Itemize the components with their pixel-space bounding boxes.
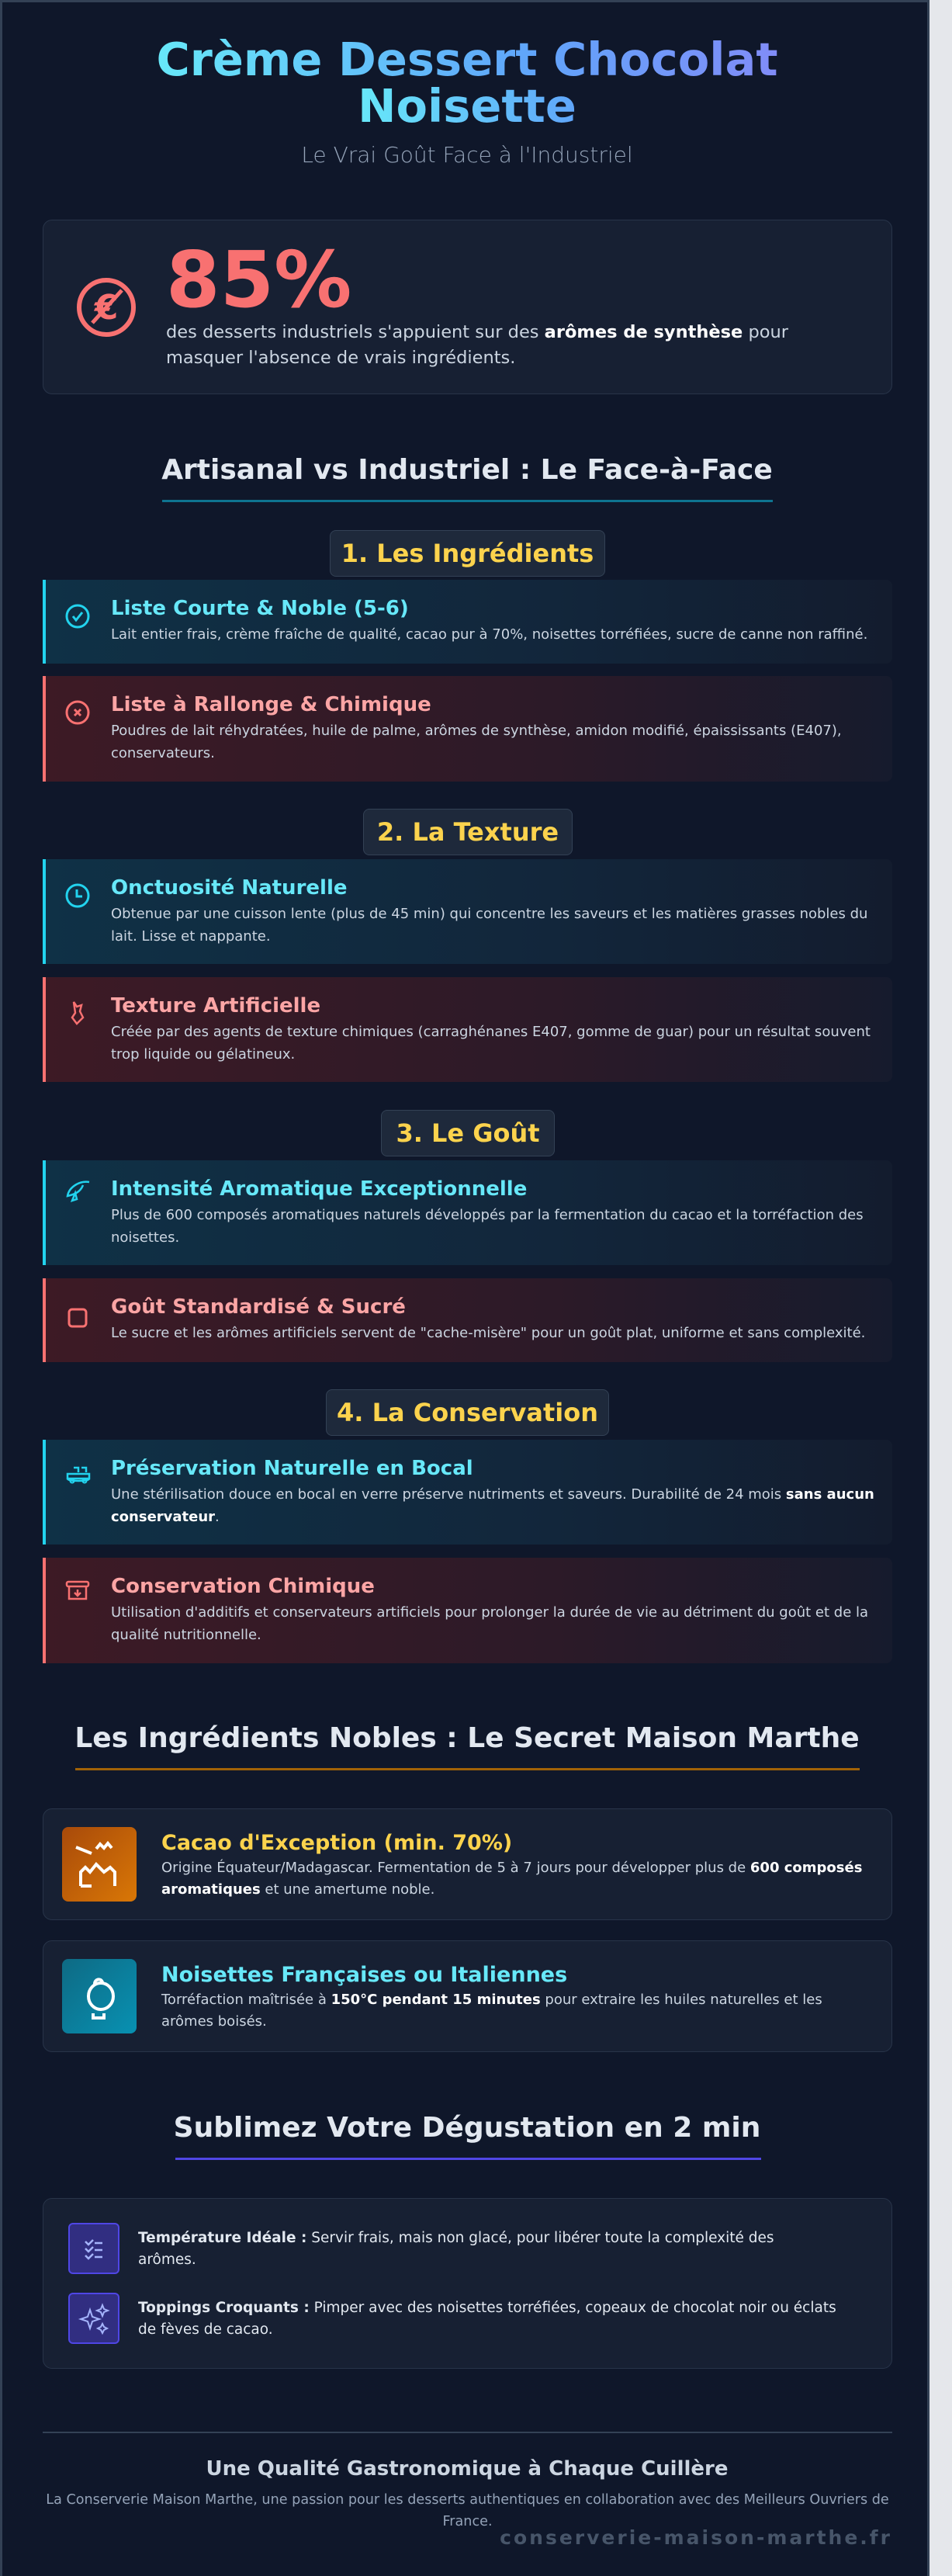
card: noisettes: Torréfaction maîtrisée à 150°C pendant 15 minutes pour extraire les huiles naturelles et les arômes boisés. <box>161 1992 822 2030</box>
footer title: Une Qualité Gastronomique à Chaque Cuillère <box>206 2457 729 2481</box>
tip: toppings <box>68 2293 836 2344</box>
tab 1 <box>330 530 605 577</box>
card: intensité <box>43 1160 892 1265</box>
watermark: conserverie-maison-marthe.fr <box>500 2526 892 2549</box>
card: intensité: Intensité Aromatique Exceptionnelle <box>111 1177 527 1201</box>
icon: cross <box>65 700 90 725</box>
tips panel <box>43 2198 892 2369</box>
icon: square <box>68 1309 87 1327</box>
card: liste courte: Liste Courte & Noble (5-6) <box>111 597 409 620</box>
title: Crème Dessert Chocolat <box>156 33 778 86</box>
card: préservation: Préservation Naturelle en Bocal <box>111 1457 473 1480</box>
tip: température: Température Idéale : Servir frais, mais non glacé, pour libérer toute la complexité des arômes. <box>138 2230 774 2268</box>
card: texture artificielle: Créée par des agents de texture chimiques (carraghénanes E407, gomme de guar) pour un résultat souvent trop liquide ou gélatineux. <box>111 1024 871 1063</box>
tab 3 <box>381 1110 555 1156</box>
card: noisettes <box>43 1940 892 2052</box>
tab 4 <box>326 1389 609 1436</box>
stat text: des desserts industriels s'appuient sur des arômes de synthèse pour masquer l'absence de vrais ingrédients. <box>166 322 788 368</box>
icon: sparkles <box>68 2293 119 2344</box>
heading: dégustation: Sublimez Votre Dégustation en 2 min <box>174 2112 760 2144</box>
card: texture artificielle: Texture Artificielle <box>111 994 320 1018</box>
card: liste rallonge: Liste à Rallonge & Chimique <box>111 693 431 716</box>
icon: thermo <box>68 2223 119 2274</box>
card: noisettes: Noisettes Françaises ou Italiennes <box>161 1963 567 1987</box>
card: conservation chimique: Conservation Chimique <box>111 1575 375 1598</box>
tab 2 <box>363 809 573 855</box>
subtitle: Le Vrai Goût Face à l'Industriel <box>301 142 633 168</box>
card: onctuosité: Onctuosité Naturelle <box>111 876 347 900</box>
icon: jar truck <box>67 1467 90 1484</box>
icon: check <box>65 604 90 629</box>
tab 4: 4. La Conservation <box>337 1398 598 1427</box>
icon: euro crossed: € <box>94 288 118 328</box>
icon: cacao <box>62 1827 137 1902</box>
icon: euro crossed <box>77 278 136 337</box>
tab 1: 1. Les Ingrédients <box>341 539 594 568</box>
icon: noisette <box>62 1959 137 2033</box>
stat panel <box>43 220 892 394</box>
card: onctuosité <box>43 859 892 964</box>
card: cacao: Origine Équateur/Madagascar. Fermentation de 5 à 7 jours pour développer plus de 600 composés aromatiques et une amertume noble. <box>161 1860 862 1898</box>
card: goût standardisé: Goût Standardisé & Sucré <box>111 1295 406 1319</box>
card: liste rallonge: Poudres de lait réhydratées, huile de palme, arômes de synthèse, amidon modifié, épaississants (E407), conservateurs. <box>111 723 842 761</box>
footer text: La Conserverie Maison Marthe, une passion pour les desserts authentiques en collaboration avec des Meilleurs Ouvriers de France. <box>46 2492 889 2529</box>
card: onctuosité: Obtenue par une cuisson lente (plus de 45 min) qui concentre les saveurs et les matières grasses nobles du lait. Lisse et nappante. <box>111 906 867 945</box>
card: préservation: Une stérilisation douce en bocal en verre préserve nutriments et saveurs. Durabilité de 24 mois sans aucun conservateur. <box>111 1486 874 1525</box>
title <box>156 33 778 133</box>
card: goût standardisé: Le sucre et les arômes artificiels servent de "cache-misère" pour un goût plat, uniforme et sans complexité. <box>111 1325 865 1341</box>
tip: toppings: Toppings Croquants : Pimper avec des noisettes torréfiées, copeaux de chocolat noir ou éclats de fèves de cacao. <box>138 2300 836 2338</box>
card: intensité: Plus de 600 composés aromatiques naturels développés par la fermentation du cacao et la torréfaction des noisettes. <box>111 1207 864 1246</box>
tip: température <box>68 2223 774 2274</box>
card: conservation chimique <box>43 1558 892 1663</box>
icon: clock <box>65 883 90 908</box>
card: liste rallonge <box>43 676 892 782</box>
title: Noisette <box>358 79 576 133</box>
card: liste courte: Lait entier frais, crème fraîche de qualité, cacao pur à 70%, noisettes torréfiées, sucre de canne non raffiné. <box>111 626 867 643</box>
icon: box <box>65 1580 90 1600</box>
stat number: 85% <box>166 234 351 325</box>
heading: ingrédients nobles: Les Ingrédients Nobles : Le Secret Maison Marthe <box>74 1722 860 1754</box>
icon: leaf <box>67 1181 90 1202</box>
card: cacao: Cacao d'Exception (min. 70%) <box>161 1831 512 1855</box>
card: conservation chimique: Utilisation d'additifs et conservateurs artificiels pour prolonger la durée de vie au détriment du goût et de la qualité nutritionnelle. <box>111 1604 868 1643</box>
tab 3: 3. Le Goût <box>396 1118 540 1148</box>
tab 2: 2. La Texture <box>377 817 559 847</box>
card: goût standardisé <box>43 1278 892 1362</box>
heading: face-à-face: Artisanal vs Industriel : Le Face-à-Face <box>161 454 773 486</box>
card: préservation <box>43 1440 892 1545</box>
card: liste courte <box>43 580 892 664</box>
card: cacao <box>43 1808 892 1920</box>
icon: drop <box>71 1001 84 1025</box>
card: texture artificielle <box>43 977 892 1082</box>
